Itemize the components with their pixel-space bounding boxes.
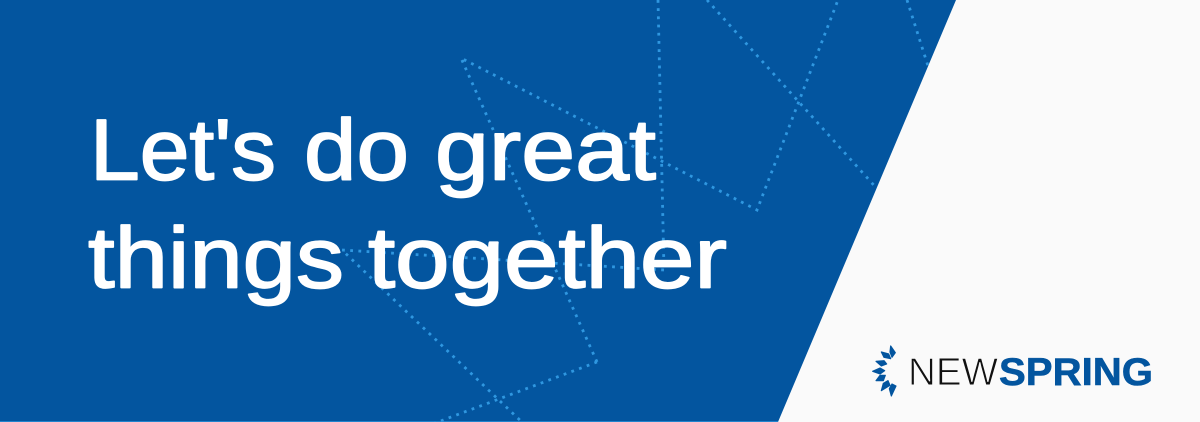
logo: NewSpring: [873, 346, 1153, 396]
title line 1: great: [435, 102, 656, 198]
title line 2: things: [88, 210, 344, 306]
title line 1: [90, 102, 656, 198]
wordmark: NEW: NEW: [908, 351, 998, 394]
wordmark: SPRING: SPRING: [999, 351, 1153, 394]
title line 1: do: [304, 102, 409, 198]
dotted geometric line pattern: [0, 0, 928, 422]
title line 2: together: [368, 210, 727, 306]
icon: sunburst: [873, 346, 896, 396]
panel: blue angled background: [0, 0, 956, 422]
title: [88, 102, 727, 306]
title line 1: Let's: [90, 102, 276, 198]
title line 2: [88, 210, 727, 306]
